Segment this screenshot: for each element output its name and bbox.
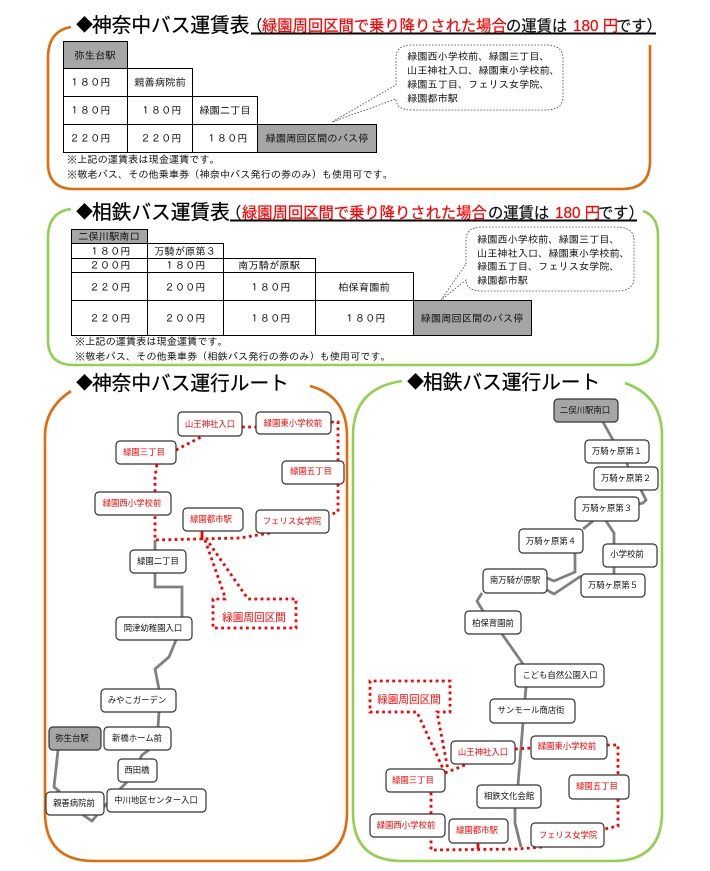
stop: サンモール商店街: サンモール商店街 <box>498 705 565 715</box>
stop: 万騎ヶ原第3: 万騎ヶ原第３ <box>582 503 632 513</box>
callout: loop section bus stops: 山王神社入口、緑園東小学校前、 <box>477 248 630 260</box>
stop: 緑園都市駅 <box>183 508 243 531</box>
stop: 岡津幼稚園入口 <box>116 617 192 640</box>
stop: 柏保育園前 <box>465 611 521 634</box>
callout: loop section bus stops: 緑園西小学校前、緑園三丁目、 <box>407 51 550 63</box>
callout: loop section label <box>370 681 450 773</box>
fare table: １８０円 <box>344 314 386 325</box>
stop: 弥生台駅: 弥生台駅 <box>55 733 89 743</box>
stop: フェリス女学院 <box>531 823 604 847</box>
stop: 西田橋 <box>118 759 157 782</box>
stop: 弥生台駅 <box>49 727 101 750</box>
fare table: 万騎が原第３ <box>154 246 216 258</box>
callout: loop section label: 緑園周回区間 <box>222 611 286 624</box>
stop: 山王神社入口 <box>451 741 515 764</box>
stop: 二俣川駅南口: 二俣川駅南口 <box>560 405 610 415</box>
fare table <box>72 230 532 336</box>
heading: Kanachu fares: 180 円 <box>573 18 618 35</box>
fare table: 親善病院前 <box>134 77 186 89</box>
route lines: regular section <box>54 540 182 821</box>
stop: 二俣川駅南口 <box>554 399 618 422</box>
heading: Sotetsu fares: です） <box>598 205 644 222</box>
stop: 山王神社入口: 山王神社入口 <box>185 419 235 429</box>
stop: 柏保育園前: 柏保育園前 <box>472 618 514 628</box>
route lines: loop section <box>155 422 338 540</box>
stop: 万騎ヶ原第2 <box>594 467 658 490</box>
panel border: orange <box>48 27 650 189</box>
stop: 緑園東小学校前: 緑園東小学校前 <box>538 741 596 751</box>
stop: 緑園東小学校前 <box>531 736 607 759</box>
fare table: １８０円 <box>69 106 111 117</box>
fare table: １８０円 <box>89 247 131 258</box>
stop: 新橋ホーム前: 新橋ホーム前 <box>112 733 162 743</box>
heading: Sotetsu fares: 緑園周回区間で乗り降りされた場合 <box>242 205 487 222</box>
stop: 万騎ヶ原第3 <box>575 497 639 521</box>
heading: Kanachu route: ◆ <box>76 369 93 394</box>
stop: 南万騎が原駅 <box>483 569 547 593</box>
notes <box>75 336 391 363</box>
stop: 相鉄文化会館: 相鉄文化会館 <box>484 791 534 801</box>
stop: 緑園五丁目: 緑園五丁目 <box>290 466 332 476</box>
stop: フェリス女学院 <box>256 510 329 533</box>
fare table: ２２０円 <box>89 314 131 325</box>
stop: 万騎ヶ原第5: 万騎ヶ原第５ <box>588 580 638 590</box>
stop: みやこガーデン <box>101 689 176 712</box>
fare table: 緑園周回区間のバス停 <box>421 312 523 325</box>
stop: 緑園五丁目 <box>569 775 629 799</box>
stop: フェリス女学院: フェリス女学院 <box>263 516 322 526</box>
stop: 西田橋: 西田橋 <box>124 765 150 775</box>
heading: Sotetsu fares: の運賃は <box>488 205 549 222</box>
stop: 中川地区センター入口: 中川地区センター入口 <box>114 795 198 805</box>
callout: loop section bus stops <box>332 45 563 122</box>
heading: Kanachu fares <box>76 11 662 37</box>
stop: 緑園三丁目 <box>116 441 176 464</box>
heading: Kanachu fares: （ <box>247 18 262 35</box>
stop: 緑園西小学校前 <box>95 492 171 515</box>
fare table: １８０円 <box>69 78 111 89</box>
fare table: 二俣川駅南口 <box>78 231 140 243</box>
panel border: orange <box>45 386 347 861</box>
stop: 小学校前: 小学校前 <box>610 549 644 559</box>
callout: loop section bus stops: 緑園五丁目、フェリス女学院、 <box>407 79 550 91</box>
route lines: regular section <box>477 422 646 847</box>
callout: loop section bus stops: 緑園都市駅 <box>407 93 459 105</box>
callout: loop section bus stops <box>441 227 634 300</box>
heading: Kanachu fares: ◆ <box>76 11 93 36</box>
stop: 万騎ヶ原第1: 万騎ヶ原第１ <box>592 446 642 456</box>
panel: Sotetsu route map <box>353 368 662 861</box>
stop: 山王神社入口 <box>178 412 242 436</box>
stop: 相鉄文化会館 <box>477 785 541 808</box>
fare table: ２００円 <box>89 261 131 272</box>
callout: loop section label: 緑園周回区間 <box>377 693 441 706</box>
callout: loop section bus stops: 緑園都市駅 <box>477 275 529 287</box>
notes: ※上記の運賃表は現金運賃です。 <box>67 154 220 166</box>
stop: 緑園都市駅: 緑園都市駅 <box>190 514 233 524</box>
stop: 緑園五丁目: 緑園五丁目 <box>576 781 618 791</box>
fare table <box>64 42 376 152</box>
stop: 緑園二丁目: 緑園二丁目 <box>137 556 179 566</box>
stop: 緑園西小学校前 <box>370 814 445 837</box>
stop: 緑園五丁目 <box>282 461 344 484</box>
stop: 緑園東小学校前 <box>256 412 331 434</box>
stop: 親善病院前 <box>46 792 104 815</box>
panel: Kanachu fare table <box>48 11 662 189</box>
notes: ※上記の運賃表は現金運賃です。 <box>75 336 228 348</box>
fare table: ２００円 <box>164 314 206 325</box>
heading: Sotetsu fares: （ <box>226 205 241 222</box>
stop: 南万騎が原駅: 南万騎が原駅 <box>490 575 541 585</box>
stop: 緑園西小学校前: 緑園西小学校前 <box>103 498 161 508</box>
stop: 岡津幼稚園入口: 岡津幼稚園入口 <box>124 623 182 633</box>
heading: Sotetsu route: 相鉄バス運行ルート <box>423 372 600 394</box>
fare table: ２２０円 <box>69 134 111 145</box>
notes <box>67 154 393 181</box>
heading: Sotetsu route: ◆ <box>407 368 424 393</box>
stop: 新橋ホーム前 <box>104 727 171 750</box>
fare table: 南万騎が原駅 <box>238 260 301 272</box>
fare table: ２２０円 <box>140 134 182 145</box>
stop: 万騎ヶ原第5 <box>581 574 645 597</box>
fare table: ２００円 <box>164 283 206 294</box>
heading: Sotetsu fares: 180 円 <box>555 205 600 222</box>
heading: Kanachu route: 神奈中バス運行ルート <box>92 373 289 395</box>
stop: 万騎ヶ原第4: 万騎ヶ原第４ <box>526 536 576 546</box>
stop: 万騎ヶ原第4 <box>519 529 583 553</box>
panel: Kanachu route map <box>45 369 347 861</box>
stop: こども自然公園入口 <box>515 664 604 687</box>
stop: 緑園三丁目: 緑園三丁目 <box>392 775 434 785</box>
stop: 親善病院前: 親善病院前 <box>53 798 95 808</box>
heading: Kanachu fares: の運賃は <box>506 18 567 35</box>
heading: Kanachu fares: です） <box>616 18 662 35</box>
stop: 山王神社入口: 山王神社入口 <box>458 747 508 757</box>
heading: Kanachu fares: 神奈中バス運賃表 <box>92 15 250 37</box>
fare table: １８０円 <box>140 106 182 117</box>
panel border: green <box>353 381 662 861</box>
stop: 小学校前 <box>603 544 657 567</box>
callout: loop section bus stops: 緑園五丁目、フェリス女学院、 <box>477 261 620 273</box>
fare table: 緑園周回区間のバス停 <box>266 132 368 145</box>
stop: 緑園東小学校前: 緑園東小学校前 <box>264 418 322 428</box>
stop: サンモール商店街 <box>490 699 575 723</box>
fare table: １８０円 <box>206 134 248 145</box>
heading: Kanachu fares: 緑園周回区間で乗り降りされた場合 <box>262 18 507 35</box>
fare table: １８０円 <box>249 283 291 294</box>
heading: Sotetsu fares: ◆ <box>76 198 93 223</box>
heading: Sotetsu fares <box>76 198 644 224</box>
stop: 緑園都市駅 <box>449 819 508 843</box>
stop: 万騎ヶ原第1 <box>585 440 649 463</box>
fare table: 柏保育園前 <box>338 282 390 294</box>
fare table: ２２０円 <box>89 283 131 294</box>
route lines: loop section <box>431 745 618 850</box>
stop: 緑園西小学校前: 緑園西小学校前 <box>377 820 435 830</box>
fare table: １８０円 <box>249 314 291 325</box>
heading: Sotetsu fares: 相鉄バス運賃表 <box>92 202 230 224</box>
fare table: 緑園二丁目 <box>199 105 251 117</box>
callout: loop section bus stops: 緑園西小学校前、緑園三丁目、 <box>477 234 620 246</box>
fare table: １８０円 <box>164 261 206 272</box>
stop: 緑園三丁目: 緑園三丁目 <box>123 447 165 457</box>
callout: loop section bus stops: 山王神社入口、緑園東小学校前、 <box>407 65 560 77</box>
fare table: 弥生台駅 <box>74 50 116 62</box>
stop: みやこガーデン: みやこガーデン <box>108 695 166 705</box>
stop: 緑園都市駅: 緑園都市駅 <box>456 825 499 835</box>
stop: こども自然公園入口: こども自然公園入口 <box>522 670 598 680</box>
notes: ※敬老パス、その他乗車券（神奈中バス発行の券のみ）も使用可です。 <box>67 169 393 181</box>
notes: ※敬老パス、その他乗車券（相鉄バス発行の券のみ）も使用可です。 <box>75 351 391 363</box>
callout: loop section label <box>205 540 296 628</box>
stop: 万騎ヶ原第2: 万騎ヶ原第２ <box>601 473 651 483</box>
stop: 緑園二丁目 <box>130 550 186 573</box>
stop: 緑園三丁目 <box>386 769 445 792</box>
panel border: green <box>48 209 658 365</box>
stop: フェリス女学院: フェリス女学院 <box>539 830 598 840</box>
stop: 中川地区センター入口 <box>107 789 206 812</box>
panel: Sotetsu fare table <box>48 198 658 365</box>
